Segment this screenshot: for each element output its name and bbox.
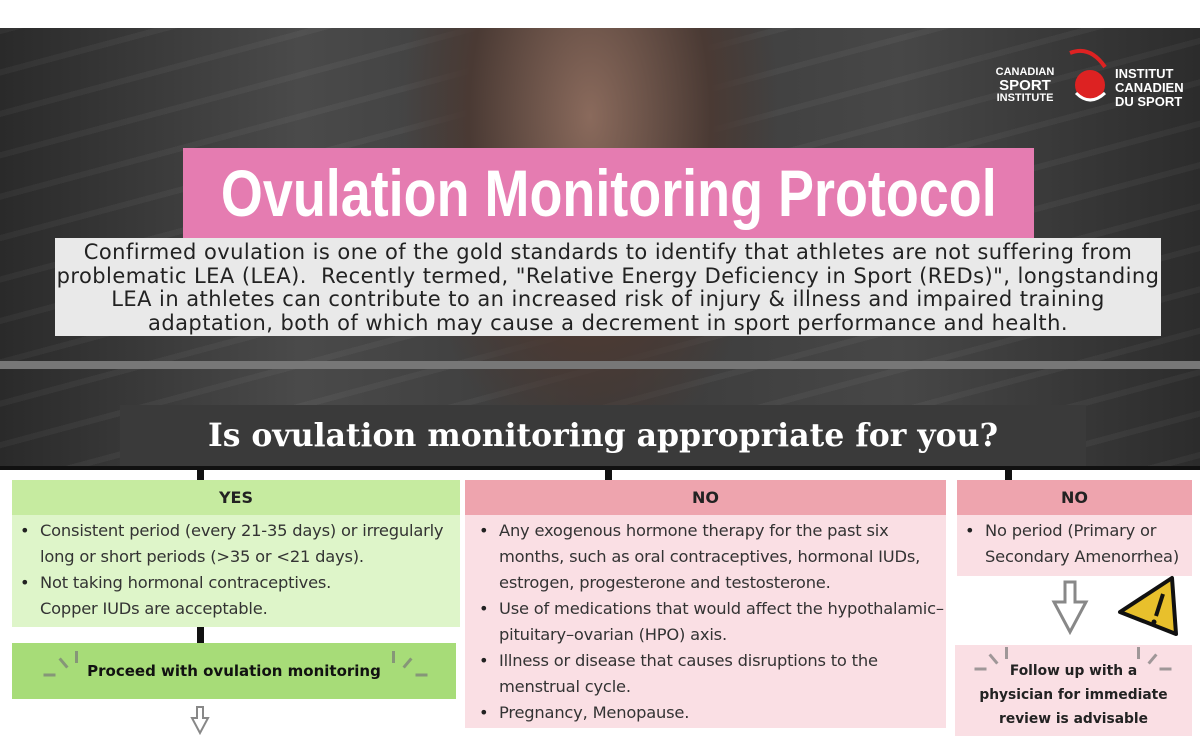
panel: no (hormones): Pregnancy, Menopause. xyxy=(499,703,689,722)
logo: SPORT xyxy=(999,77,1051,94)
panel: yes: Consistent period (every 21-35 days) or irregularly xyxy=(40,521,443,540)
callout: physician: review is advisable xyxy=(999,711,1148,727)
icon: logo mark xyxy=(1069,48,1107,102)
logo: INSTITUTE xyxy=(997,92,1053,104)
panel: no (hormones) xyxy=(465,480,946,728)
panel: no (hormones): estrogen, progesterone and testosterone. xyxy=(499,573,831,592)
panel: yes: Not taking hormonal contraceptives. xyxy=(40,573,331,592)
intro text: adaptation, both of which may cause a decrement in sport performance and health. xyxy=(148,310,1068,334)
callout: physician: physician for immediate xyxy=(979,687,1168,703)
question heading xyxy=(120,405,1086,466)
intro text: problematic LEA (LEA). Recently termed, "Relative Energy Deficiency in Sport (REDs)", longstanding xyxy=(57,264,1159,288)
question heading: Is ovulation monitoring appropriate for you? xyxy=(208,417,998,454)
panel: no (hormones): Use of medications that would affect the hypothalamic– xyxy=(499,599,944,618)
panel: no (hormones): Any exogenous hormone therapy for the past six xyxy=(499,521,889,540)
panel: yes: long or short periods (>35 or <21 days). xyxy=(40,547,364,566)
background photo xyxy=(0,28,1200,470)
panel: no (hormones): menstrual cycle. xyxy=(499,677,631,696)
connectors xyxy=(0,466,1200,470)
intro text: Confirmed ovulation is one of the gold standards to identify that athletes are not suffering from xyxy=(84,240,1132,264)
panel: no (hormones): pituitary–ovarian (HPO) axis. xyxy=(499,625,727,644)
callout: physician xyxy=(955,645,1192,736)
callout: physician: Follow up with a xyxy=(1010,663,1137,679)
proceed box xyxy=(12,643,456,699)
icon: warning xyxy=(1118,576,1178,636)
panel: yes: Copper IUDs are acceptable. xyxy=(40,599,268,618)
panel: no (amenorrhea): Secondary Amenorrhea) xyxy=(985,547,1179,566)
logo: CANADIAN xyxy=(996,66,1054,78)
panel: no (hormones): Illness or disease that causes disruptions to the xyxy=(499,651,878,670)
proceed box: Proceed with ovulation monitoring xyxy=(87,662,381,680)
intro text: LEA in athletes can contribute to an increased risk of injury & illness and impaired training xyxy=(111,287,1105,311)
logo xyxy=(996,48,1184,109)
panel: no (hormones): NO xyxy=(692,488,719,507)
logo: INSTITUT xyxy=(1115,66,1174,81)
icon: arrow down yes xyxy=(190,706,210,735)
panel: no (amenorrhea) xyxy=(957,480,1192,576)
panel: no (amenorrhea): No period (Primary or xyxy=(985,521,1156,540)
intro text xyxy=(55,238,1161,336)
logo: CANADIEN xyxy=(1115,80,1184,95)
title: Ovulation Monitoring Protocol xyxy=(221,156,996,230)
panel: yes: YES xyxy=(219,488,253,507)
panel: no (hormones): months, such as oral contraceptives, hormonal IUDs, xyxy=(499,547,920,566)
panel: yes xyxy=(12,480,460,627)
icon: arrow down no xyxy=(1052,580,1088,635)
panel: no (amenorrhea): NO xyxy=(1061,488,1088,507)
logo: DU SPORT xyxy=(1115,94,1182,109)
